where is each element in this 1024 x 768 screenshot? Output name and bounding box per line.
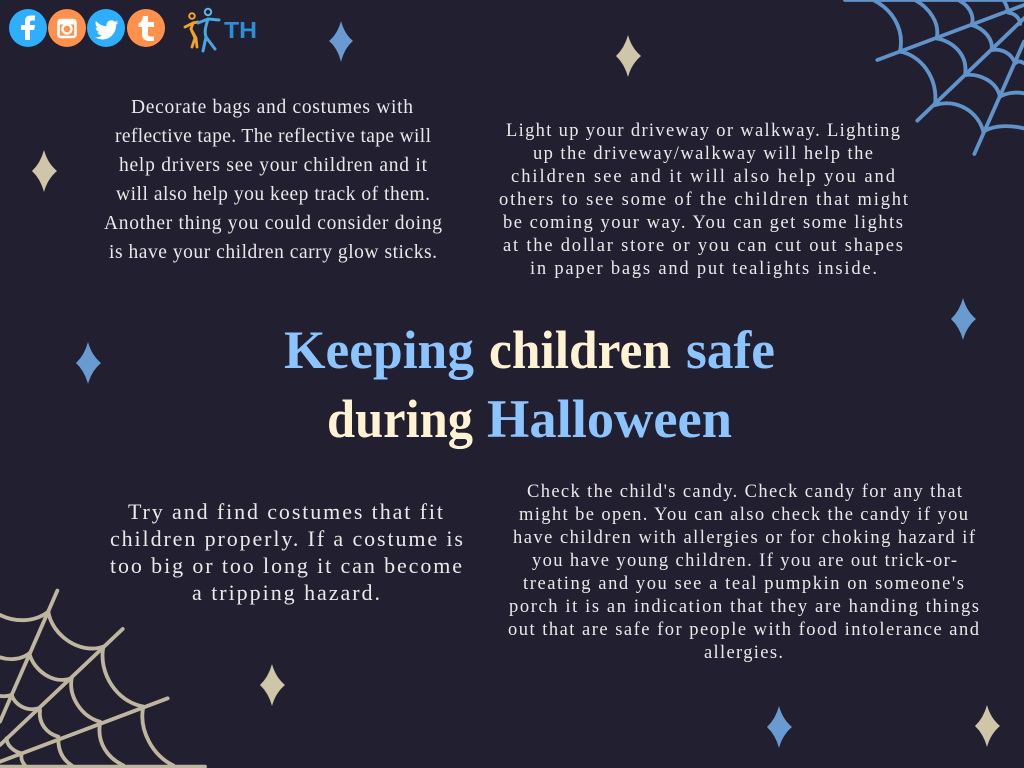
text block: reflective tape: reflective tape. The reflective tape will (115, 126, 432, 147)
title: children (489, 320, 671, 380)
text block: costumes: too big or too long it can become (110, 553, 462, 578)
text block: reflective tape: will also help you keep track of them. (116, 184, 430, 205)
icon: twitter (87, 9, 125, 47)
title: Halloween (487, 389, 732, 449)
text block: light up driveway: in paper bags and put tealights inside. (530, 259, 877, 279)
text block: candy check: out that are safe for people with food intolerance and (508, 620, 980, 640)
text block: reflective tape: is have your children carry glow sticks. (109, 242, 437, 263)
text block: reflective tape: Another thing you could consider doing (104, 213, 442, 234)
icon: tumblr (127, 9, 165, 47)
text block: candy check: you have young children. If you are out trick-or- (532, 551, 957, 571)
title: safe (686, 320, 775, 380)
logo: TH (185, 9, 257, 51)
text block: reflective tape: help drivers see your children and it (119, 155, 428, 176)
text block: candy check: allergies. (704, 643, 783, 663)
text block: costumes: Try and find costumes that fit (128, 499, 443, 524)
spider web: bottom left (0, 591, 205, 767)
social media icons (9, 9, 165, 47)
text block: costumes (110, 499, 463, 605)
text block: candy check: have children with allergies or for choking hazard if (513, 528, 976, 548)
text block: light up driveway: children see and it will also help you and (511, 167, 896, 187)
title (284, 320, 775, 449)
text block: reflective tape (104, 97, 442, 263)
title: Keeping (284, 320, 474, 380)
text block: candy check: might be open. You can also check the candy if you (519, 505, 968, 525)
text block: light up driveway (499, 121, 909, 279)
text block: light up driveway: up the driveway/walkway will help the (533, 144, 873, 164)
text block: light up driveway: be coming your way. You can get some lights (503, 213, 903, 233)
text block: light up driveway: others to see some of the children that might (499, 190, 909, 210)
logo: TH: TH (224, 17, 257, 43)
text block: candy check: treating and you see a teal pumpkin on someone's (523, 574, 964, 594)
text block: light up driveway: at the dollar store or you can cut out shapes (503, 236, 903, 256)
text block: candy check: porch it is an indication that they are handing things (509, 597, 979, 617)
text block: candy check: Check the child's candy. Check candy for any that (527, 482, 963, 502)
text block: candy check (508, 482, 980, 663)
text block: costumes: children properly. If a costume is (110, 526, 463, 551)
title: during (327, 389, 473, 449)
icon: instagram (48, 9, 86, 47)
text block: light up driveway: Light up your driveway or walkway. Lighting (506, 121, 900, 141)
spider web: top right (845, 0, 1024, 154)
text block: costumes: a tripping hazard. (192, 580, 380, 605)
icon: facebook (9, 9, 47, 47)
text block: reflective tape: Decorate bags and costumes with (131, 97, 413, 118)
